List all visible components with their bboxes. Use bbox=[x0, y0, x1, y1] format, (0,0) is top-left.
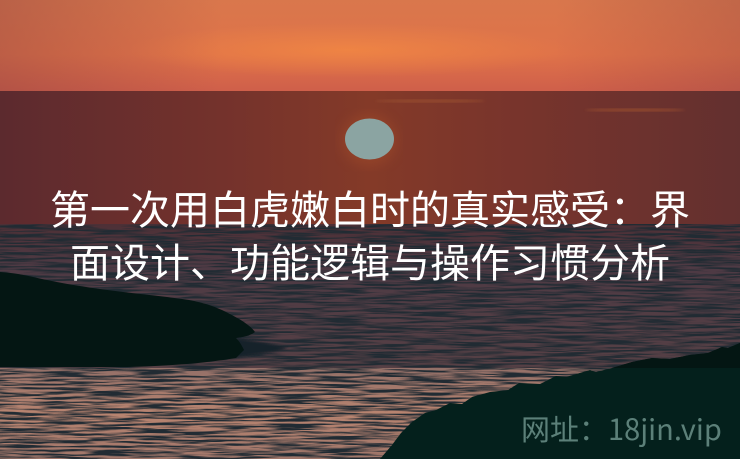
right headland silhouette bbox=[380, 343, 740, 459]
sky bbox=[0, 0, 740, 91]
left headland tail bbox=[230, 338, 288, 359]
title line 2: 面设计、功能逻辑与操作习惯分析 bbox=[70, 231, 670, 289]
darkened band below the horizon bbox=[0, 91, 740, 226]
sea, upper dark water bbox=[0, 224, 740, 368]
left headland silhouette bbox=[0, 272, 255, 367]
right headland dark upper part bbox=[612, 343, 740, 368]
sun bbox=[341, 114, 397, 166]
watermark url: 网址：18jin.vip bbox=[521, 407, 722, 449]
title line 1: 第一次用白虎嫩白时的真实感受：界 bbox=[50, 178, 690, 236]
sea, lower lit water bbox=[0, 368, 740, 459]
water ripples bbox=[0, 224, 740, 459]
